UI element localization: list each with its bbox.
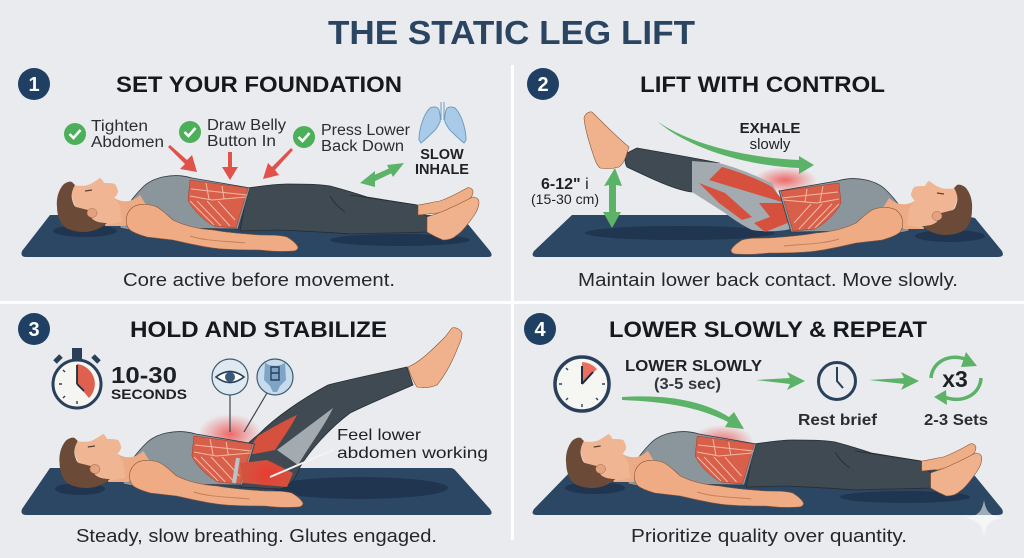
step badge 1 <box>18 68 50 100</box>
yoga mat <box>22 215 492 257</box>
slow inhale label: SLOW <box>420 147 464 163</box>
arrow to sets <box>869 372 919 390</box>
panel: step 2 lift with control <box>527 68 1003 290</box>
step badge 4: 4 <box>534 319 546 341</box>
yoga mat <box>22 468 492 515</box>
caption: Maintain lower back contact. Move slowly. <box>578 269 958 290</box>
title: THE STATIC LEG LIFT <box>328 14 695 51</box>
sparkle watermark <box>965 500 1003 536</box>
panel: step 2 lift with control: (15-30 cm) <box>531 192 599 207</box>
figure lying flat <box>566 432 982 507</box>
check labels <box>64 117 410 155</box>
abdominal glow <box>753 167 817 193</box>
panel: step 4 lower slowly and repeat: (3-5 sec) <box>654 376 721 393</box>
icon: rest clock <box>818 362 856 400</box>
step badge 1: 1 <box>28 74 40 96</box>
icon: core shield <box>244 359 293 432</box>
lower slowly label: LOWER SLOWLY <box>625 358 763 375</box>
heading: SET YOUR FOUNDATION <box>116 72 402 97</box>
duration: 10-30 <box>111 362 177 388</box>
red arrows to core <box>168 145 293 180</box>
check labels: Back Down <box>321 138 404 155</box>
panel: step 3 hold and stabilize: SECONDS <box>111 386 187 402</box>
caption: Core active before movement. <box>123 269 395 290</box>
feel label: Feel lower <box>337 427 422 444</box>
check labels: Tighten <box>91 118 148 135</box>
caption: Prioritize quality over quantity. <box>631 525 907 546</box>
caption: Steady, slow breathing. Glutes engaged. <box>76 525 437 546</box>
step badge 2 <box>527 68 559 100</box>
icon: eye <box>212 359 248 432</box>
pointer line <box>270 450 333 477</box>
curved green arrow <box>657 121 814 174</box>
figure holding legs up <box>59 328 462 507</box>
panel: step 4 lower slowly and repeat <box>524 313 1003 546</box>
heading: LIFT WITH CONTROL <box>640 72 885 97</box>
curved green arrow <box>622 396 744 429</box>
icon: repeat cycle <box>931 352 981 405</box>
icon: clock with wedge <box>555 357 609 411</box>
check labels: Press Lower <box>321 122 410 139</box>
panel: step 1 set your foundation <box>18 68 492 290</box>
check labels: Button In <box>207 133 276 150</box>
check labels: Abdomen <box>91 134 164 151</box>
exhale label: EXHALE <box>740 120 800 137</box>
heading: LOWER SLOWLY & REPEAT <box>609 317 927 342</box>
step badge 3 <box>18 313 50 345</box>
figure lifting legs <box>584 112 972 254</box>
icon: lungs <box>419 102 466 143</box>
step badge 2: 2 <box>537 74 549 96</box>
yoga mat <box>533 215 1003 257</box>
step badge 4 <box>524 313 556 345</box>
height label: 6-12" i <box>541 176 589 193</box>
check labels: Draw Belly <box>207 117 286 134</box>
yoga mat <box>533 470 1003 515</box>
x3: x3 <box>942 366 968 392</box>
abdominal glow <box>690 425 754 459</box>
panel: step 3 hold and stabilize: abdomen working <box>337 445 488 462</box>
sets label: 2-3 Sets <box>924 412 988 429</box>
panel: step 2 lift with control: slowly <box>750 136 791 153</box>
rest label: Rest brief <box>798 412 878 429</box>
slow inhale label: INHALE <box>415 162 469 178</box>
figure lying flat <box>57 176 479 251</box>
arrow to rest <box>756 372 805 390</box>
green double arrow <box>360 163 404 187</box>
abdominal glow <box>198 414 262 454</box>
vertical height arrow <box>603 168 622 228</box>
slow inhale label <box>415 147 469 178</box>
heading: HOLD AND STABILIZE <box>130 317 387 342</box>
panel: step 3 hold and stabilize <box>18 313 492 546</box>
step badge 3: 3 <box>28 319 40 341</box>
icon: stopwatch <box>53 348 101 408</box>
